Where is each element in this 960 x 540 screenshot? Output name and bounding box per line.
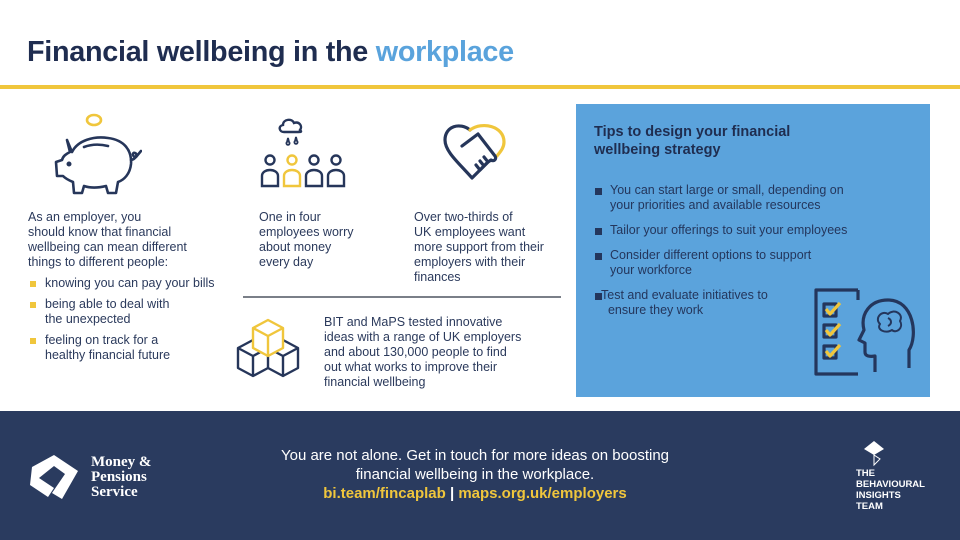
text: employer intro xyxy=(28,210,215,362)
tips list: Test and evaluate initiatives to xyxy=(601,288,768,302)
text: employer intro: feeling on track for a xyxy=(45,333,158,347)
text: BIT and MaPS: BIT and MaPS tested innovative xyxy=(324,315,502,329)
tips heading xyxy=(594,124,790,158)
text: employer intro: the unexpected xyxy=(45,312,130,326)
text: two-thirds: UK employees want xyxy=(414,225,525,239)
text: one in four xyxy=(259,210,354,269)
text: BIT and MaPS: financial wellbeing xyxy=(324,375,425,389)
text: employer intro: wellbeing can mean different xyxy=(28,240,187,254)
text: BIT and MaPS xyxy=(324,315,521,389)
text: one in four: One in four xyxy=(259,210,321,224)
tips list: Consider different options to support xyxy=(610,248,811,262)
icon: piggy bank xyxy=(54,114,142,194)
divider xyxy=(243,296,561,298)
icon: people with rain cloud xyxy=(260,118,346,188)
footer message: financial wellbeing in the workplace. xyxy=(356,466,594,483)
text: employer intro: knowing you can pay your bills xyxy=(45,276,215,290)
logo: Money & Pensions Service xyxy=(30,454,151,500)
tips heading: Tips to design your financial xyxy=(594,124,790,140)
logo: Behavioural Insights Team: INSIGHTS xyxy=(856,490,901,501)
text: two-thirds: employers with their xyxy=(414,255,525,269)
text: one in four: employees worry xyxy=(259,225,353,239)
icon: checklist and head xyxy=(814,288,915,376)
logo: Behavioural Insights Team: THE xyxy=(856,468,875,479)
text: one in four: every day xyxy=(259,255,313,269)
tips list xyxy=(595,183,847,317)
tips list: ensure they work xyxy=(608,303,703,317)
footer message: You are not alone. Get in touch for more ideas on boosting xyxy=(281,447,669,464)
text: employer intro: being able to deal with xyxy=(45,297,169,311)
text: two-thirds: Over two-thirds of xyxy=(414,210,513,224)
logo: Behavioural Insights Team xyxy=(856,441,925,512)
logo: Behavioural Insights Team: BEHAVIOURAL xyxy=(856,479,925,490)
tips list: your workforce xyxy=(610,263,692,277)
logo: Behavioural Insights Team: TEAM xyxy=(856,501,883,512)
logo: Money & Pensions Service: Money & xyxy=(91,454,151,470)
text: two-thirds: finances xyxy=(414,270,461,284)
text: BIT and MaPS: and about 130,000 people to find xyxy=(324,345,507,359)
panel: tips xyxy=(576,104,930,397)
tips list: You can start large or small, depending on xyxy=(610,183,844,197)
icon: heart handshake xyxy=(443,124,506,180)
footer message xyxy=(281,447,669,502)
tips heading: wellbeing strategy xyxy=(594,142,721,158)
text: employer intro: healthy financial future xyxy=(45,348,170,362)
text: BIT and MaPS: ideas with a range of UK employers xyxy=(324,330,521,344)
text: two-thirds: more support from their xyxy=(414,240,544,254)
logo: Money & Pensions Service: Pensions xyxy=(91,469,147,485)
tips list: Tailor your offerings to suit your employees xyxy=(610,223,847,237)
tips list: your priorities and available resources xyxy=(610,198,821,212)
footer xyxy=(0,411,960,540)
icon: cubes xyxy=(236,318,300,378)
text: two-thirds xyxy=(414,210,544,284)
text: employer intro: things to different people: xyxy=(28,255,168,269)
text: one in four: about money xyxy=(259,240,331,254)
footer message: bi.team/fincaplab | maps.org.uk/employers xyxy=(323,485,627,502)
yellow rule xyxy=(0,85,960,89)
text: BIT and MaPS: out what works to improve their xyxy=(324,360,497,374)
text: employer intro: As an employer, you xyxy=(28,210,141,224)
title: Financial wellbeing in the workplace xyxy=(27,36,514,68)
text: employer intro: should know that financial xyxy=(28,225,171,239)
logo: Money & Pensions Service: Service xyxy=(91,484,138,500)
